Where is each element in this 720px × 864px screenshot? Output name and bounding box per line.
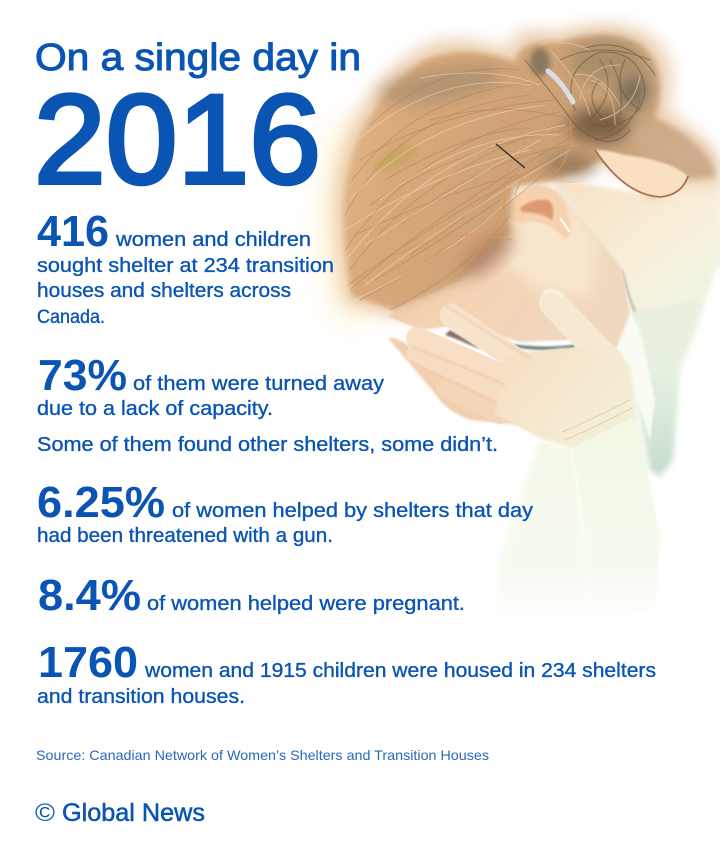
hair tie xyxy=(548,71,573,102)
stat: 416 women and children: houses and shelters across xyxy=(37,280,291,302)
stat: 73% turned away: of them were turned away xyxy=(133,373,384,395)
little finger xyxy=(444,389,500,416)
stat: 416 women and children xyxy=(37,207,334,328)
stat: 8.4% pregnant: 8.4% xyxy=(38,571,141,620)
stat: 1760 women housed xyxy=(37,638,656,708)
loop of hair at nape xyxy=(595,150,688,197)
warm glow behind hair xyxy=(322,115,382,325)
stat: 416 women and children: 416 xyxy=(37,207,109,256)
underside of fingers xyxy=(388,338,563,443)
hair pin xyxy=(496,144,525,168)
stat: 1760 women housed: women and 1915 children were housed in 234 shelters xyxy=(144,660,656,682)
stat: 73% turned away: due to a lack of capacity. xyxy=(37,398,273,420)
credit: Global News: Global News xyxy=(62,799,205,827)
stat: 73% turned away: Some of them found other shelters, some didn’t. xyxy=(37,434,498,456)
source note: Source: Canadian Network of Women’s Shelters and Transition Houses xyxy=(36,747,489,763)
palm and wrist xyxy=(495,345,637,448)
shoulder and neck xyxy=(553,178,720,477)
photo: woman covering her face xyxy=(322,24,720,625)
stat: 1760 women housed: and transition houses. xyxy=(37,686,245,708)
title year: 2016 xyxy=(34,68,321,210)
head, cheek and ear xyxy=(387,186,630,350)
stat: 416 women and children: Canada. xyxy=(37,307,105,328)
bun strands xyxy=(525,45,655,141)
stat: 8.4% pregnant: of women helped were pregnant. xyxy=(147,593,465,615)
ear xyxy=(510,186,572,240)
rear forearm xyxy=(495,440,592,625)
stat: 6.25% threatened with a gun xyxy=(37,478,533,547)
stat: 6.25% threatened with a gun: 6.25% xyxy=(37,478,165,527)
ring finger xyxy=(415,353,510,398)
soft outer edge of hair xyxy=(334,24,720,318)
hair shadows xyxy=(369,40,719,285)
stat: 6.25% threatened with a gun: of women helped by shelters that day xyxy=(172,500,533,522)
front forearm xyxy=(573,417,660,622)
hair xyxy=(334,24,720,318)
title line: On a single day in xyxy=(35,37,361,79)
index finger xyxy=(451,315,535,372)
stat: 416 women and children: women and children xyxy=(115,229,311,251)
stat: 6.25% threatened with a gun: had been threatened with a gun. xyxy=(37,525,333,547)
thumb xyxy=(553,303,602,355)
hair strands xyxy=(345,42,655,310)
stat: 416 women and children: sought shelter at 234 transition xyxy=(37,255,334,277)
main mass of hair xyxy=(344,36,716,310)
middle finger xyxy=(417,338,525,385)
stat: 8.4% pregnant xyxy=(38,571,465,620)
credit: Global News: © xyxy=(35,799,56,827)
stat: 1760 women housed: 1760 xyxy=(38,638,138,687)
stat: 73% turned away: 73% xyxy=(38,351,127,400)
hand xyxy=(388,291,637,448)
stat: 73% turned away xyxy=(37,351,498,456)
